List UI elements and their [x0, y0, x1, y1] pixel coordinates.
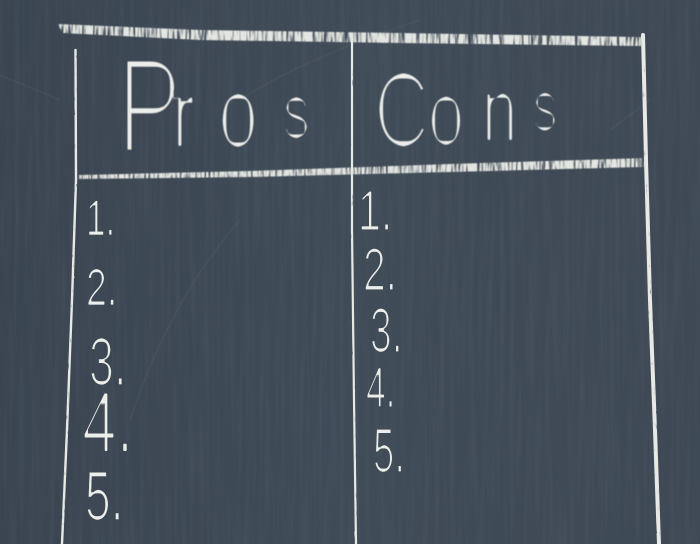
pros item 4: 4.	[82, 374, 134, 470]
cons item 4: 4.	[366, 357, 395, 420]
cons item 5: 5.	[373, 416, 405, 485]
pros item 2: 2.	[86, 258, 117, 316]
pros item 5: 5.	[85, 456, 124, 535]
cons item 1: 1.	[358, 178, 392, 243]
heading: Pros	[117, 30, 310, 181]
pros item 1: 1.	[86, 191, 115, 247]
heading: Pros: r	[172, 61, 195, 168]
heading: Pros: s	[282, 68, 310, 155]
right column line	[643, 35, 659, 544]
left column line	[62, 50, 76, 544]
heading: Pros: o	[218, 57, 258, 169]
pros list	[82, 191, 134, 535]
heading: Pros: P	[117, 30, 182, 181]
cons list	[358, 178, 405, 485]
heading: Cons: o	[428, 61, 465, 165]
cons item 3: 3.	[370, 297, 403, 366]
heading: Cons	[374, 49, 558, 170]
centre column line	[352, 38, 356, 544]
cons item 2: 2.	[363, 236, 397, 303]
heading: Cons: s	[532, 67, 558, 147]
top rule	[58, 24, 641, 46]
header rule	[79, 158, 644, 179]
pros item 3: 3.	[89, 325, 126, 400]
heading: Cons: C	[374, 49, 430, 170]
heading: Cons: n	[482, 60, 518, 161]
